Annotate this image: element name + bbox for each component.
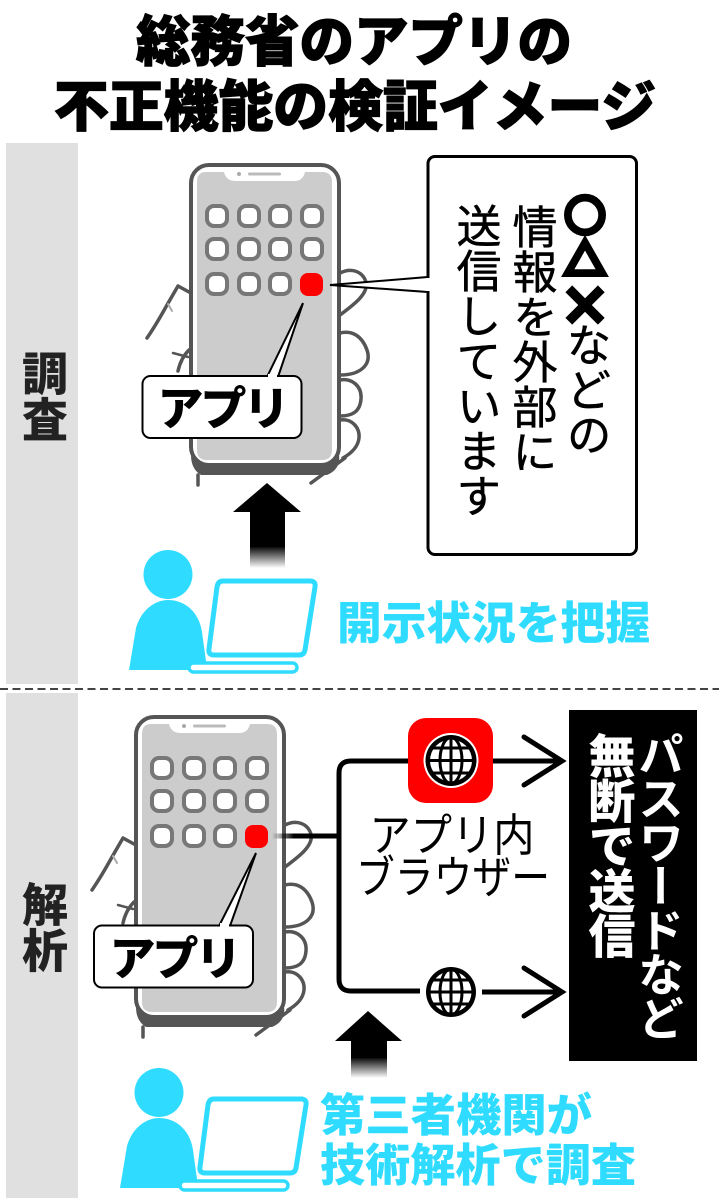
caption: survey: 開示状況を把握 (337, 598, 650, 649)
phone in hand: survey (147, 165, 368, 485)
callout text (450, 203, 610, 518)
arrowhead: lower (524, 968, 562, 1016)
panel: password sent without permission (569, 710, 697, 1061)
red app (300, 273, 323, 296)
panel label: 調査 (6, 143, 78, 684)
label: in-app browser: アプリ内 (370, 810, 534, 861)
icon: red browser app (408, 718, 493, 803)
title: 総務省のアプリの (136, 11, 572, 73)
arrow: analysis (335, 1011, 402, 1078)
red app (245, 825, 268, 848)
phone body (191, 165, 339, 475)
icon: globe (426, 967, 476, 1017)
app label: survey (142, 303, 303, 438)
arrow: survey (233, 483, 301, 568)
arrowhead: upper (524, 737, 562, 785)
callout symbols: × (560, 267, 610, 339)
flow lines (272, 737, 562, 992)
label: in-app browser (356, 810, 550, 903)
app label: analysis (94, 853, 256, 988)
callout text: 情報を外部に (506, 204, 556, 474)
title (54, 11, 656, 138)
person with laptop: analysis (120, 1068, 306, 1190)
panel: password sent without permission: 無断で送信 (582, 732, 635, 959)
callout: data sending (330, 156, 636, 554)
caption: analysis: 技術解析で調査 (320, 1140, 636, 1191)
phone in hand: analysis (92, 717, 313, 1037)
app label: survey: アプリ (158, 383, 286, 435)
hand (147, 270, 368, 485)
app label: analysis: アプリ (110, 933, 238, 985)
screen (197, 172, 332, 460)
callout symbols: △ (565, 228, 605, 286)
callout text: 送信しています (450, 203, 501, 518)
caption: analysis (320, 1090, 636, 1191)
panel label: 調査: 調査 (16, 350, 68, 442)
callout symbols: ○ (565, 184, 605, 242)
panel: password sent without permission: パスワードなど (632, 731, 684, 1039)
person with laptop: survey (129, 550, 315, 672)
callout symbols (560, 184, 610, 339)
app icons (152, 758, 267, 846)
panel label: 解析: 解析 (16, 881, 68, 973)
caption: analysis: 第三者機関が (320, 1090, 592, 1141)
screen (142, 724, 277, 1012)
panel label: 解析 (6, 693, 78, 1198)
label: in-app browser: ブラウザー (356, 852, 550, 903)
phone body (136, 717, 284, 1027)
title: 不正機能の検証イメージ (54, 76, 656, 138)
callout text: などの (560, 322, 610, 457)
hand (92, 822, 313, 1037)
app icons (207, 206, 322, 294)
